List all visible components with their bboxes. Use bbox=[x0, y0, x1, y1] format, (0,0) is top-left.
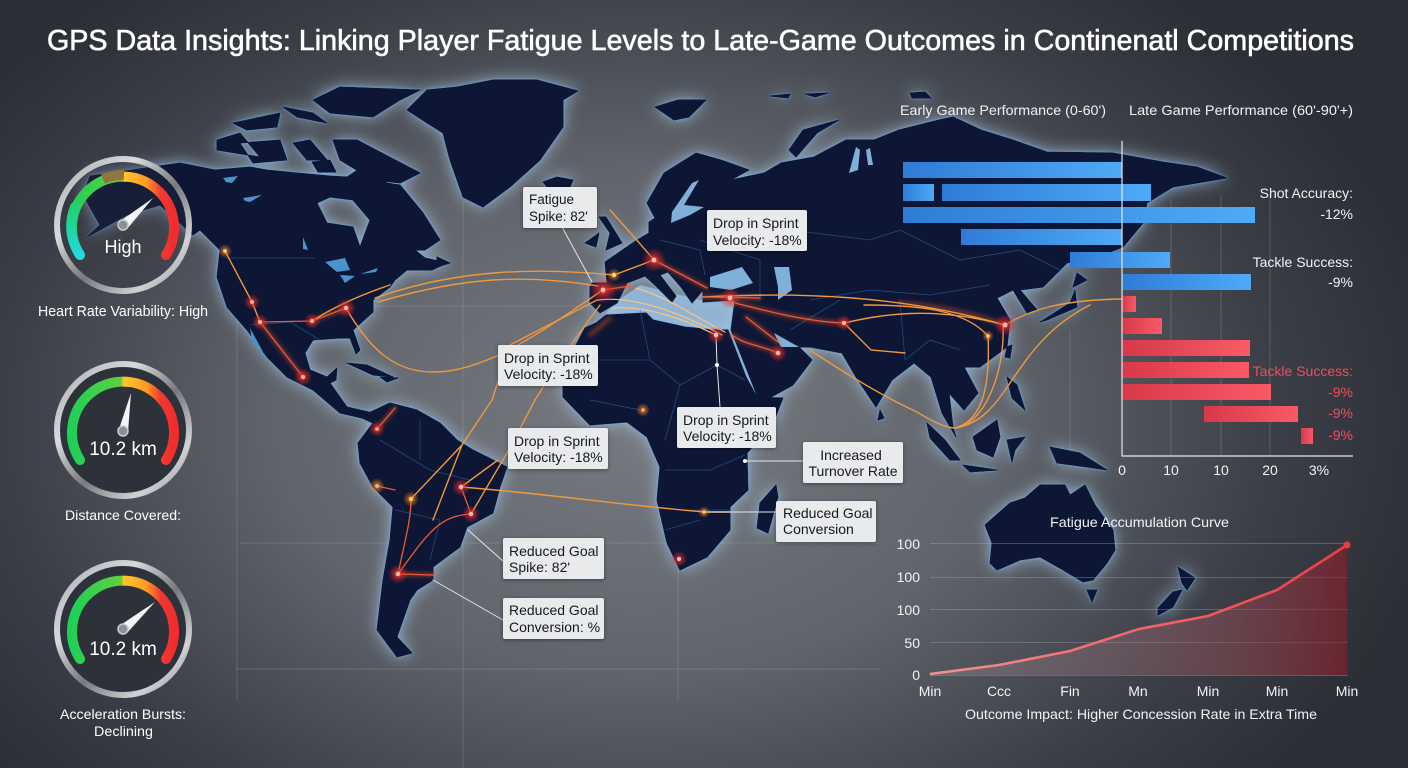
callout: goal conversion percent bbox=[503, 598, 604, 639]
islands: Asia Pacific bbox=[878, 273, 1107, 472]
callout: sprint velocity Atlantic: Drop in Sprint bbox=[504, 350, 590, 366]
red metric labels: -9% bbox=[1328, 427, 1353, 443]
white metric labels: Tackle Success: bbox=[1253, 254, 1353, 270]
y axis labels: 100 bbox=[897, 569, 920, 585]
x axis labels: Min bbox=[1197, 683, 1219, 699]
callout: goal conversion percent: Conversion: % bbox=[509, 619, 600, 635]
red bars bbox=[1122, 296, 1313, 444]
callout: sprint velocity South America bbox=[508, 428, 608, 469]
x axis labels: Min bbox=[1336, 683, 1358, 699]
Tasmania and New Zealand bbox=[1087, 567, 1195, 615]
callout: fatigue spike: Spike: 82' bbox=[529, 209, 588, 224]
continent: South America bbox=[358, 403, 507, 657]
gauge: distance covered: Distance Covered: bbox=[65, 507, 181, 523]
red metric labels bbox=[1253, 363, 1353, 443]
continent: North America bbox=[83, 163, 447, 420]
chart title: Fatigue Accumulation Curve bbox=[1050, 514, 1229, 530]
axis tick labels bbox=[1118, 462, 1329, 478]
white metric labels: Shot Accuracy: bbox=[1260, 185, 1353, 201]
axis tick labels: 10 bbox=[1163, 462, 1179, 478]
x axis labels: Fin bbox=[1060, 683, 1080, 699]
callout: sprint velocity Africa: Drop in Sprint bbox=[683, 412, 769, 428]
callout: sprint velocity South America: Drop in Sprint bbox=[514, 433, 600, 449]
lakes and enclosed seas bbox=[223, 147, 873, 358]
x axis labels: Min bbox=[1266, 683, 1288, 699]
area fill bbox=[930, 545, 1347, 675]
white metric labels: -9% bbox=[1328, 274, 1353, 290]
islands: Europe and Arctic bbox=[543, 92, 931, 250]
Greenland bbox=[407, 80, 578, 207]
x axis labels bbox=[919, 683, 1358, 699]
gauge: heart rate variability: Heart Rate Variability: High bbox=[38, 304, 208, 320]
bar chart: early vs late game performance bbox=[900, 102, 1353, 478]
callout: goal conversion percent: Reduced Goal bbox=[509, 602, 599, 618]
callout: reduced goal spike: Reduced Goal bbox=[509, 543, 599, 559]
callout: goal conversion: Reduced Goal bbox=[783, 505, 873, 521]
red metric labels: -9% bbox=[1328, 384, 1353, 400]
gauge: acceleration bursts: Declining bbox=[94, 723, 153, 739]
gauge: acceleration bursts bbox=[57, 563, 189, 739]
callout: fatigue spike bbox=[523, 187, 597, 228]
country borders bbox=[225, 230, 1060, 560]
curve line bbox=[930, 545, 1347, 674]
gauge: acceleration bursts: 10.2 km bbox=[89, 639, 157, 660]
y axis labels: 0 bbox=[912, 667, 920, 683]
chart axes bbox=[1122, 141, 1353, 456]
outcome caption: Outcome Impact: Higher Concession Rate in Extra Time bbox=[965, 706, 1317, 722]
y axis labels: 100 bbox=[897, 536, 920, 552]
line chart: fatigue accumulation curve bbox=[897, 514, 1358, 722]
gauge: heart rate variability bbox=[38, 159, 208, 320]
arctic islands bbox=[217, 87, 450, 382]
y axis labels: 50 bbox=[904, 635, 920, 651]
horizontal grid bbox=[930, 544, 1348, 676]
chart headings: Early Game Performance (0-60') bbox=[900, 102, 1106, 118]
white metric labels: -12% bbox=[1320, 206, 1353, 222]
world map bbox=[83, 80, 1227, 657]
x axis labels: Mn bbox=[1128, 683, 1148, 699]
y axis labels: 100 bbox=[897, 602, 920, 618]
end point bbox=[1344, 542, 1350, 548]
callout: turnover rate: Turnover Rate bbox=[809, 463, 898, 479]
route glow bbox=[260, 260, 1005, 575]
callout: reduced goal spike: Spike: 82' bbox=[509, 559, 570, 575]
y axis labels bbox=[897, 536, 920, 683]
callout: fatigue spike: Fatigue bbox=[529, 192, 574, 207]
inland seas bbox=[600, 285, 765, 400]
route nodes bbox=[218, 244, 1016, 584]
blue bars bbox=[903, 162, 1255, 290]
grid lines bbox=[235, 195, 1270, 768]
callout: sprint velocity Atlantic: Velocity: -18% bbox=[504, 366, 593, 382]
callout: sprint velocity Europe: Velocity: -18% bbox=[713, 232, 802, 248]
callout: turnover rate bbox=[803, 442, 903, 483]
callout: sprint velocity Atlantic bbox=[498, 345, 598, 386]
axis tick labels: 10 bbox=[1213, 462, 1229, 478]
x axis labels: Min bbox=[919, 683, 941, 699]
gauge: acceleration bursts: Acceleration Bursts: bbox=[60, 706, 186, 722]
red metric labels: -9% bbox=[1328, 405, 1353, 421]
gauge: distance covered bbox=[57, 364, 189, 523]
gauge: distance covered: 10.2 km bbox=[89, 439, 157, 460]
continent: Australia bbox=[985, 485, 1115, 582]
callout: sprint velocity South America: Velocity: -18% bbox=[514, 449, 603, 465]
Madagascar bbox=[757, 485, 778, 533]
callout: goal conversion: Conversion bbox=[783, 521, 854, 537]
continent: Eurasia bbox=[590, 117, 1227, 437]
callout: sprint velocity Europe bbox=[707, 210, 807, 251]
flight routes bbox=[225, 210, 1122, 620]
axis tick labels: 0 bbox=[1118, 462, 1126, 478]
chart headings bbox=[900, 102, 1353, 118]
red routes bbox=[260, 260, 844, 575]
Mediterranean routes bbox=[598, 288, 725, 336]
callout: sprint velocity Africa bbox=[677, 407, 776, 448]
callout: goal conversion bbox=[776, 501, 876, 542]
continent: Africa bbox=[563, 313, 783, 570]
orange routes bbox=[225, 210, 1122, 520]
callout: sprint velocity Europe: Drop in Sprint bbox=[713, 215, 799, 231]
white metric labels bbox=[1253, 185, 1353, 290]
gauge: heart rate variability: High bbox=[104, 237, 142, 257]
callout: turnover rate: Increased bbox=[820, 447, 882, 463]
chart headings: Late Game Performance (60'-90'+) bbox=[1129, 102, 1353, 118]
x axis labels: Ccc bbox=[987, 683, 1011, 699]
callout: reduced goal spike bbox=[503, 538, 604, 579]
leader lines bbox=[433, 227, 803, 620]
axis tick labels: 20 bbox=[1262, 462, 1278, 478]
title: GPS Data Insights: Linking Player Fatigue Levels to Late-Game Outcomes in Continenatl Competitions bbox=[47, 25, 1354, 57]
red metric labels: Tackle Success: bbox=[1253, 363, 1353, 379]
axis tick labels: 3% bbox=[1309, 462, 1329, 478]
callout: sprint velocity Africa: Velocity: -18% bbox=[683, 428, 772, 444]
